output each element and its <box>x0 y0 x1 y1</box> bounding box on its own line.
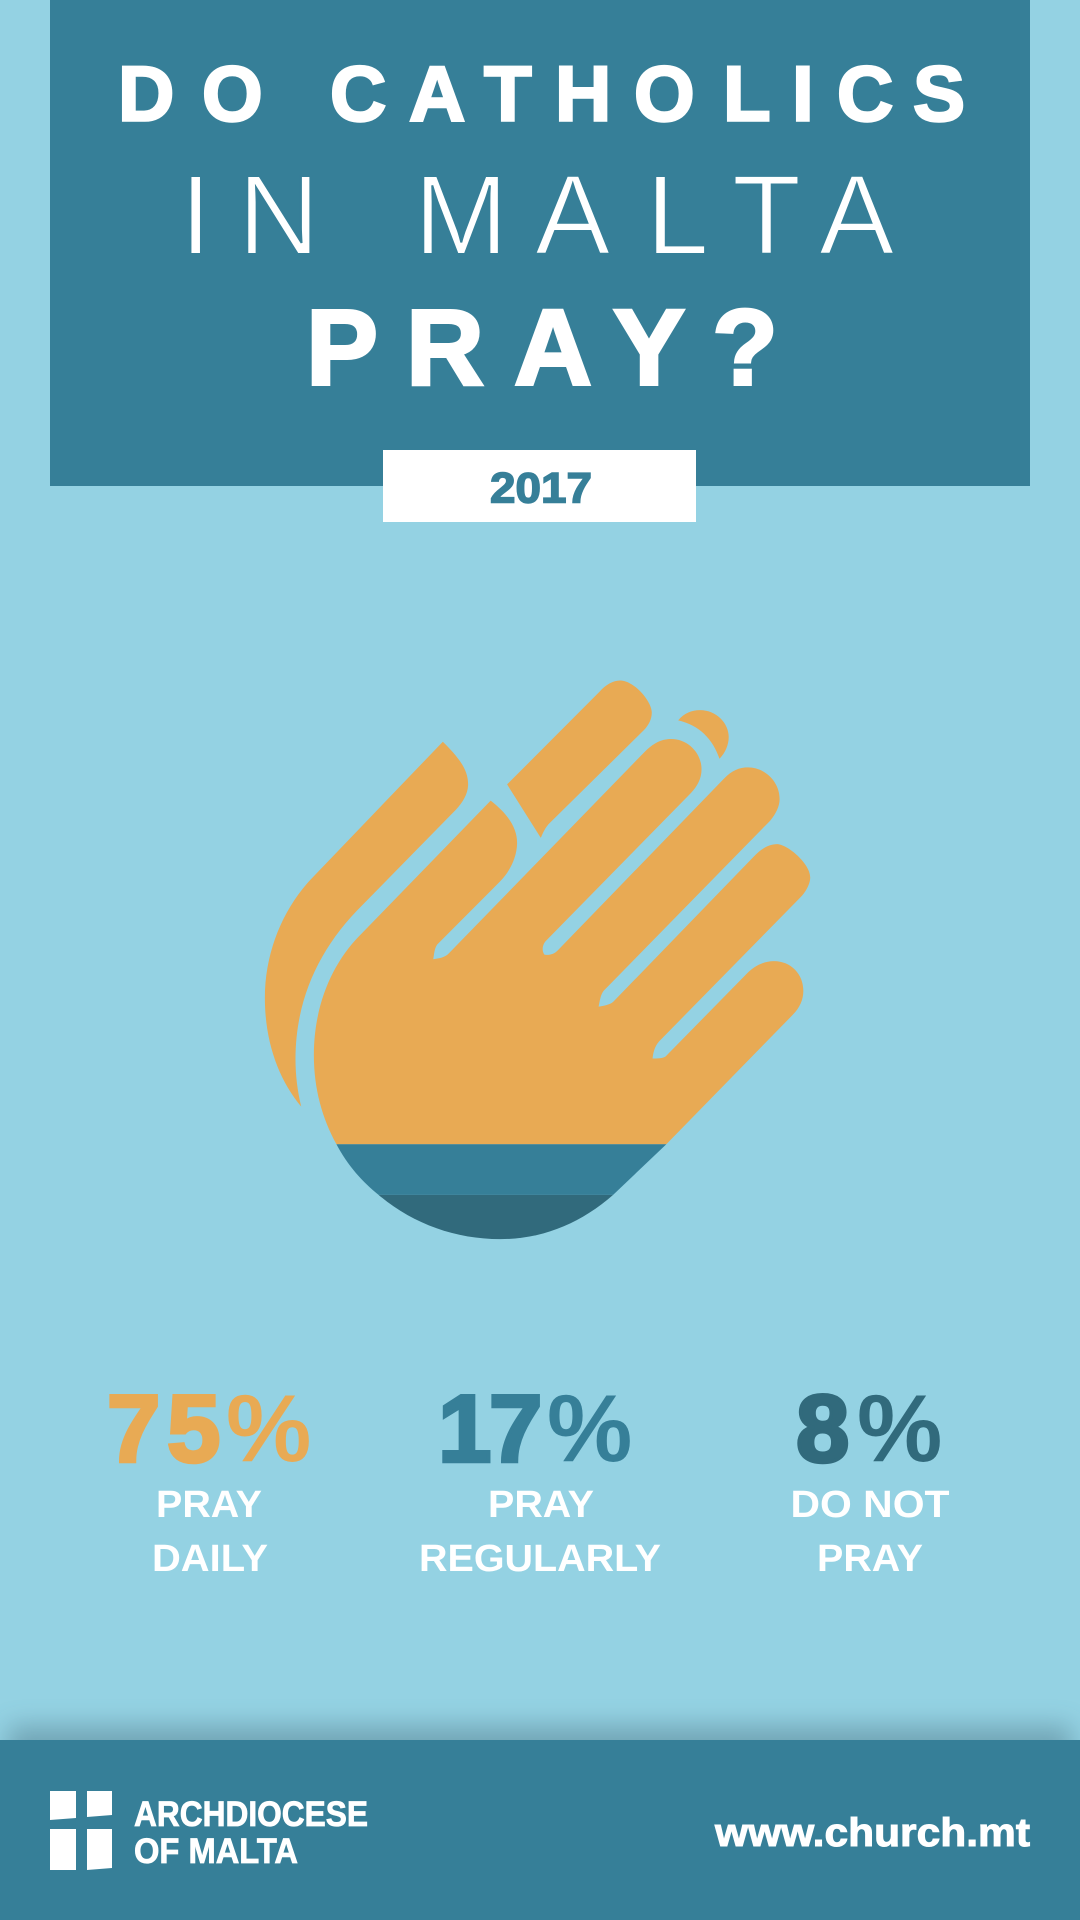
logo text: OF MALTA <box>134 1832 298 1871</box>
value 17%: 17% <box>438 1376 632 1482</box>
logo text: ARCHDIOCESE <box>134 1795 368 1834</box>
label <box>152 1484 268 1580</box>
year badge: 2017 <box>490 464 592 512</box>
back hand palm edge <box>265 742 468 1107</box>
year badge <box>383 450 696 522</box>
back hand finger <box>507 680 652 838</box>
title line: IN MALTA: INMALTA <box>180 152 895 278</box>
title line: PRAY?: PRAY? <box>306 286 778 408</box>
label <box>419 1484 661 1580</box>
sleeve band <box>336 1144 666 1195</box>
value 8%: 8% <box>796 1376 942 1482</box>
panel: footer <box>0 1740 1080 1920</box>
label: PRAY <box>156 1484 262 1526</box>
stat: 75% pray daily <box>107 1376 311 1580</box>
icon: praying hands <box>265 680 810 1239</box>
icon: archdiocese cross logo <box>50 1791 112 1870</box>
label: PRAY <box>817 1538 923 1580</box>
stat: 17% pray regularly <box>419 1376 661 1580</box>
label: DO NOT <box>790 1484 950 1526</box>
value 75%: 75% <box>107 1376 311 1482</box>
label <box>790 1484 950 1580</box>
back hand fingertip <box>678 710 729 759</box>
label: REGULARLY <box>419 1538 661 1580</box>
website url: www.church.mt <box>714 1811 1030 1855</box>
label: DAILY <box>152 1538 268 1580</box>
label: PRAY <box>488 1484 594 1526</box>
stat: 8% do not pray <box>790 1376 950 1580</box>
panel: header <box>50 0 1030 522</box>
logo text <box>134 1795 368 1871</box>
front hand <box>314 739 810 1144</box>
title line: DO CATHOLICS: DOCATHOLICS <box>118 50 965 138</box>
sleeve cuff <box>379 1195 613 1239</box>
